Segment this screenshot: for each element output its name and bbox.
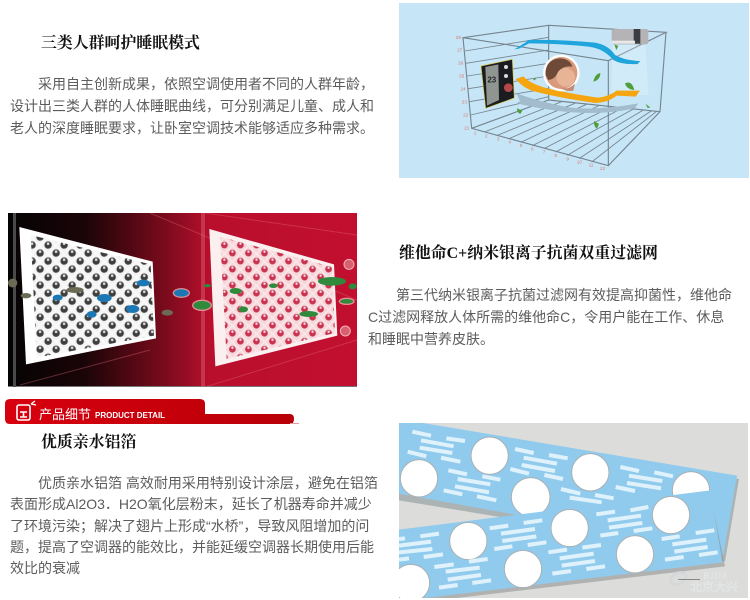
text block: double filter: 和睡眠中营养皮肤。 [368,331,494,347]
chart: room wireframe [463,25,666,166]
text block: aluminium foil: 了环境污染；解决了翅片上形成“水桥”，导致风阻增加的问 [10,518,369,534]
chart: axis numbers: 3 [497,137,500,142]
chart: axis numbers: 23 [462,99,467,104]
baby portrait [543,55,580,91]
chart: axis numbers: 6 [531,146,534,151]
heading: sleep modes: 三类人群呵护睡眠模式 [41,35,200,52]
text block: aluminium foil: 题，提高了空调器的能效比，并能延缓空调器长期使用后能 [10,539,374,555]
particles [53,280,189,318]
panel: black filter [8,227,357,366]
chart: axis numbers: 11 [589,163,594,168]
chart: axis numbers: 9 [566,156,569,161]
chart: axis numbers: 21 [464,125,470,130]
chart: axis numbers: 12 [600,166,605,171]
text block: double filter: 第三代纳米银离子抗菌过滤网有效提高抑菌性，维他命 [396,287,732,303]
chart: axis numbers: 25 [459,73,465,78]
chart: axis numbers: 22 [463,112,469,117]
illustration: sleep curve 3D chart [399,3,749,178]
chart: axis numbers: 1 [474,130,477,135]
banner: product detail: PRODUCT DETAIL [95,411,165,420]
banner: product detail [5,399,299,424]
chart: axis numbers: 2 [485,133,488,138]
text block: double filter [368,287,732,347]
thermostat display [481,59,514,108]
chart: axis numbers: 26 [458,61,464,66]
chart: axis numbers: 24 [460,86,466,91]
chart: axis numbers: 7 [543,150,546,155]
text block: sleep modes: 采用自主创新成果，依照空调使用者不同的人群年龄， [38,76,374,92]
front foil strip [423,508,725,598]
chart: axis numbers: 8 [554,153,557,158]
illustration: aluminium foil [392,423,748,600]
air conditioner unit [612,29,648,95]
chart: axis numbers: 28 [456,35,461,40]
heading: aluminium foil: 优质亲水铝箔 [41,434,136,451]
back foil strip [399,478,739,562]
chart: axis numbers [456,35,605,171]
text block: aluminium foil: 优质亲水铝箔 高效耐用采用特别设计涂层，避免在铝箔 [38,475,378,491]
banner label: 产品细节 [39,407,91,422]
chart: axis numbers: 27 [457,48,463,53]
watermark: BJDX logo [676,571,738,592]
text block: aluminium foil: 效比的衰减 [10,560,80,576]
text block: sleep modes: 设计出三类人群的人体睡眠曲线，可分别满足儿童、成人和 [10,98,374,114]
thermostat display: 23 [487,76,497,85]
watermark: BJDX logo: BJDX [703,570,728,580]
illustration: filter panels [8,213,357,388]
chart: axis numbers: 5 [520,143,523,148]
text block: aluminium foil: 表面形成Al2O3．H2O氧化层粉末，延长了机器寿命并减少 [10,496,372,512]
text block: aluminium foil [10,475,378,576]
icon: product badge [17,401,36,420]
orange sleep ribbon [516,76,640,103]
blue airflow ribbon [514,40,640,64]
chart: axis numbers: 4 [508,140,511,145]
text block: double filter: C过滤网释放人体所需的维他命C，令用户能在工作、休息 [368,309,724,325]
curve shadow [517,93,638,113]
leaves [517,44,650,129]
text block: sleep modes [10,76,374,136]
red filter [209,229,337,366]
watermark: BJDX logo: 北京大兴 [690,580,738,594]
text block: sleep modes: 老人的深度睡眠要求，让卧室空调技术能够适应多种需求。 [10,120,374,136]
chart: axis numbers: 10 [577,159,582,164]
heading: double filter: 维他命C+纳米银离子抗菌双重过滤网 [399,245,658,262]
